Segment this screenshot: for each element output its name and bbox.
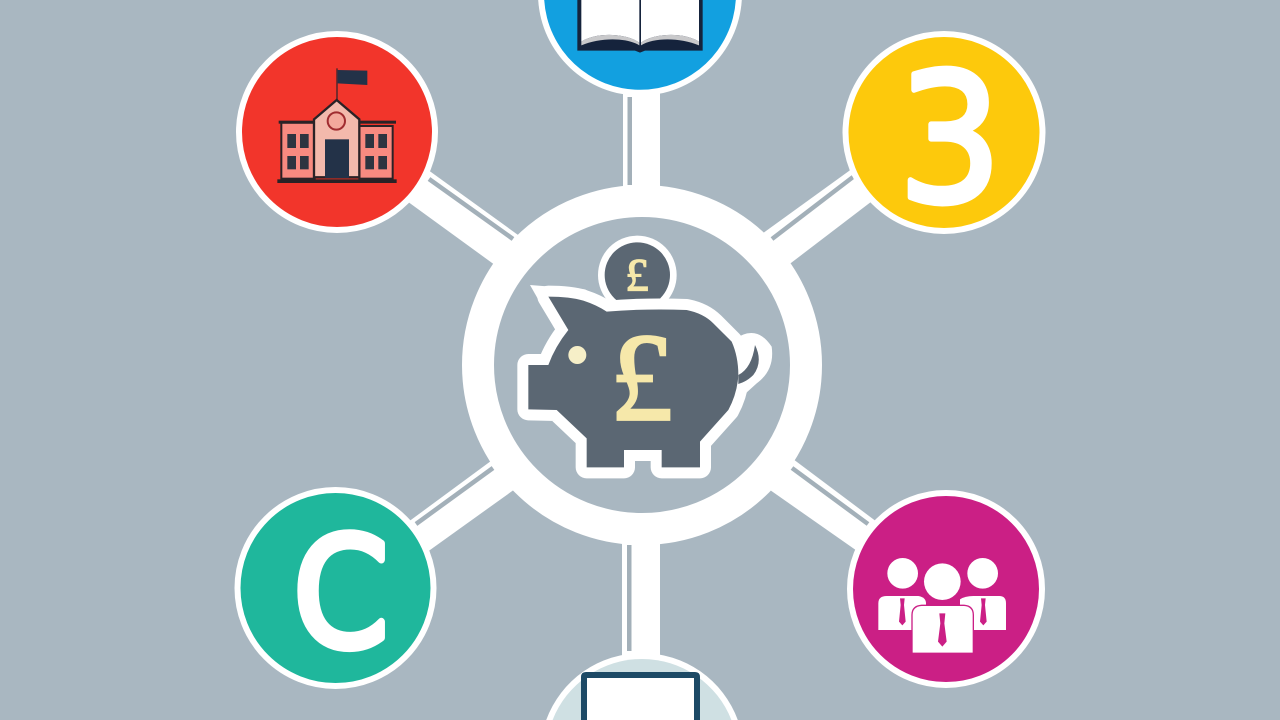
- coin: £: [625, 249, 649, 301]
- numeral 3: 3: [898, 36, 1002, 244]
- pig ear tip: [530, 285, 607, 337]
- connector: top left: [400, 167, 525, 276]
- coin: [598, 236, 677, 314]
- pig eye: [568, 346, 586, 364]
- node: book: [538, 0, 742, 96]
- book icon: [577, 0, 703, 53]
- pig body: [528, 297, 738, 467]
- pig tail backing: [733, 333, 772, 400]
- tablet screen: [587, 678, 694, 720]
- pound sign: £: [610, 309, 673, 447]
- letter C: C: [293, 506, 389, 683]
- school icon: [277, 68, 397, 183]
- connector: bottom left: [400, 458, 522, 560]
- connector: bottom right: [760, 453, 885, 560]
- people icon: [878, 558, 1006, 653]
- node: tablet: [546, 653, 738, 720]
- connector: top right: [755, 163, 880, 279]
- node: letter C: [238, 490, 434, 686]
- central ring: [478, 201, 806, 529]
- pig tail: [738, 345, 759, 384]
- node: school: [239, 34, 435, 230]
- connector: top: [623, 80, 660, 200]
- tablet icon: [581, 672, 700, 720]
- piggy bank icon: [528, 236, 772, 467]
- node: people: [850, 493, 1042, 685]
- connector: bottom: [622, 530, 660, 665]
- node: number three: [846, 34, 1042, 244]
